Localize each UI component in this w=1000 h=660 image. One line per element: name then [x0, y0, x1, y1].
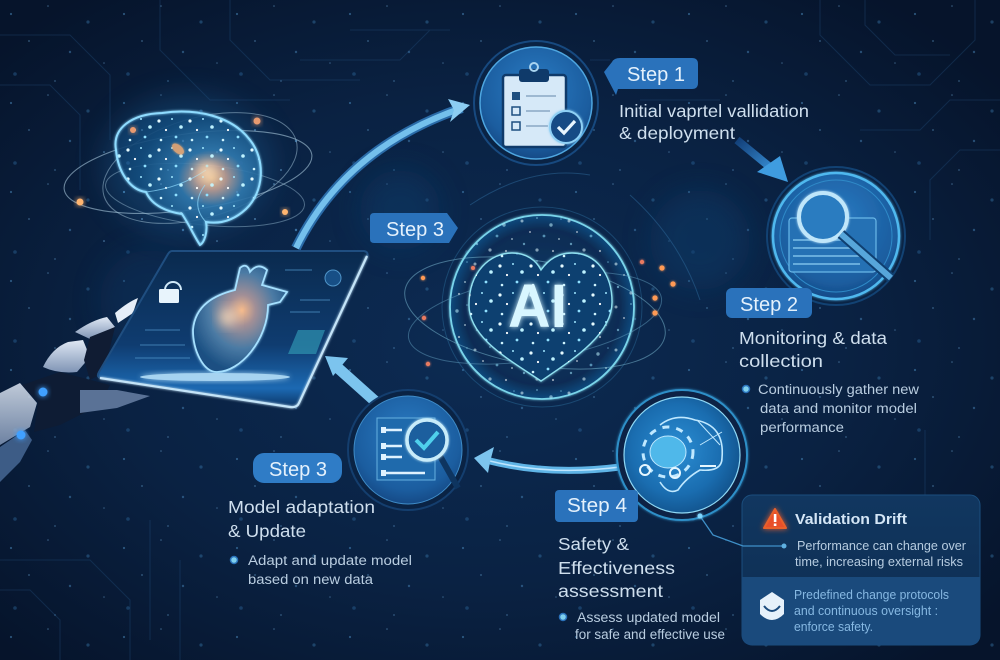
safety text: Predefined change protocols	[794, 588, 949, 602]
tablet	[98, 251, 368, 407]
checklist	[377, 418, 435, 480]
label: Step 1: Step 1	[627, 64, 685, 86]
label: Step 2	[726, 288, 812, 318]
panel lower section	[742, 577, 980, 645]
check badge	[550, 111, 582, 143]
text: step 2 description	[739, 328, 919, 435]
brain hologram	[59, 92, 317, 250]
callout heading: Validation Drift	[795, 511, 907, 528]
text: step 3 description: Model adaptation	[228, 497, 375, 517]
icon: warning triangle	[764, 509, 786, 528]
text: step 2 description: data and monitor model	[760, 401, 917, 416]
arrow: tablet to step 1	[296, 99, 470, 248]
callout text: time, increasing external risks	[795, 555, 963, 569]
arrow: step 3 to tablet	[325, 356, 376, 402]
label: Step 1	[604, 58, 698, 95]
label: Step 3 upper	[370, 213, 458, 243]
text: step 1 description: Initial vaprtel vallidation	[619, 101, 809, 121]
heart with particles	[465, 250, 615, 385]
label: Step 4: Step 4	[567, 495, 627, 517]
label: Step 4	[555, 490, 638, 522]
step 3 node: checklist magnifier	[348, 390, 468, 510]
text: step 4 description: for safe and effective use	[575, 627, 725, 642]
magnifier with check	[407, 420, 458, 488]
callout text: Performance can change over	[797, 539, 966, 553]
central AI heart sphere	[396, 173, 700, 407]
text: step 3 description	[228, 497, 412, 587]
text: step 2 description: Continuously gather new	[758, 382, 919, 397]
heart hologram	[193, 266, 287, 372]
magnifier	[799, 193, 891, 278]
callout text	[795, 539, 966, 569]
label: Step 3 lower	[253, 453, 342, 483]
arrow: step 4 to step 3	[474, 447, 620, 473]
tablet shield badge	[325, 270, 341, 286]
text: step 4 description: assessment	[558, 581, 663, 601]
label: Step 3 upper: Step 3	[386, 219, 444, 241]
label: Step 2: Step 2	[740, 294, 798, 316]
connector: step 4 to callout	[698, 514, 786, 548]
text: step 3 description: & Update	[228, 521, 306, 541]
document	[789, 218, 876, 272]
text: step 3 description: Adapt and update model	[248, 553, 412, 568]
text: step 4 description	[558, 534, 725, 642]
text: step 2 description: collection	[739, 351, 823, 371]
text: step 2 description: Monitoring & data	[739, 328, 887, 348]
AI label: AI	[508, 272, 567, 340]
label: Step 3 lower: Step 3	[269, 459, 327, 481]
text: step 3 description: based on new data	[248, 572, 374, 587]
text: step 4 description: Assess updated model	[577, 610, 720, 625]
tablet data tile	[288, 330, 325, 354]
tablet horizon glow	[140, 373, 290, 381]
robotic hand	[0, 298, 150, 482]
bullet icon	[560, 614, 566, 620]
text: step 1 description: & deployment	[619, 123, 735, 143]
safety text: and continuous oversight :	[794, 604, 938, 618]
step 2 node: magnifier on document	[767, 167, 905, 305]
safety text	[794, 588, 949, 634]
text: step 2 description: performance	[760, 420, 844, 435]
icon: shield	[760, 592, 784, 620]
arrow: step 1 to step 2	[737, 140, 788, 182]
step 1 node: clipboard	[474, 41, 598, 165]
bullet icon	[742, 386, 750, 392]
step 4 node: brain and gear	[617, 390, 747, 520]
safety text: enforce safety.	[794, 620, 873, 634]
text: step 4 description: Safety &	[558, 534, 629, 554]
text: step 4 description: Effectiveness	[558, 558, 675, 578]
lock icon	[159, 282, 181, 303]
clipboard icon	[503, 63, 566, 147]
text: step 1 description	[619, 101, 809, 143]
bullet icon	[230, 556, 238, 564]
callout panel: validation drift	[742, 495, 980, 645]
